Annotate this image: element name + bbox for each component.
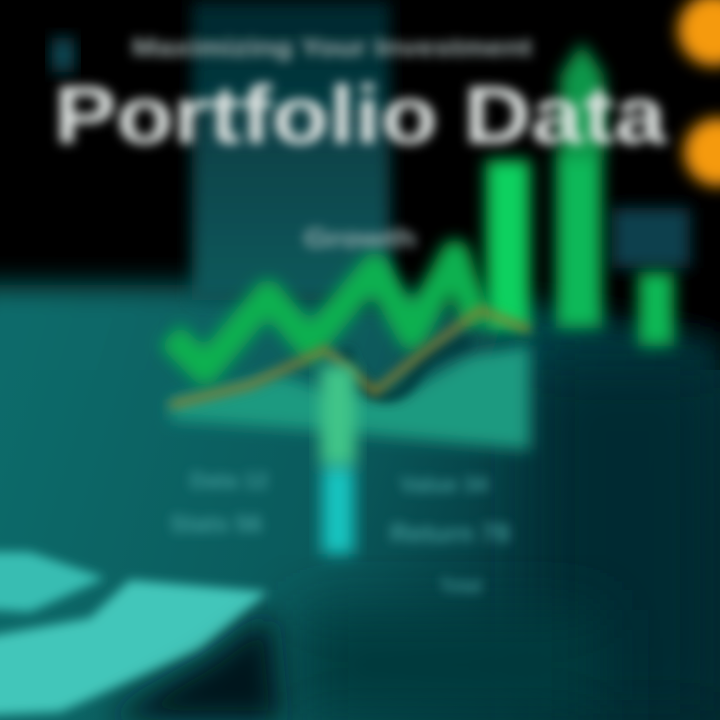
bar chart: tall green bars: [486, 42, 674, 346]
text block: lower data table: Value 34: [400, 472, 489, 497]
panel: bright teal bottom-left cards: [0, 552, 268, 716]
text block: lower data table: Data 12: [190, 468, 268, 493]
icon: orange coins: [678, 0, 720, 186]
shadow: bottom dark wedge: [105, 615, 280, 720]
line chart: dark shadow curve: [345, 340, 470, 396]
title: Portfolio Data: [54, 70, 668, 161]
chart label: Growth: [304, 223, 416, 253]
text block: lower data table: Return 78: [390, 518, 510, 548]
text block: lower data table: Stats 56: [170, 511, 262, 538]
line chart: orange trend line: [170, 310, 530, 405]
panel: right small teal screen: [612, 208, 690, 268]
subtitle: Maximizing Your Investment: [132, 34, 533, 62]
icon: small teal mark by title: [52, 38, 74, 72]
chart: central vertical bar: [320, 365, 356, 554]
text block: lower data table: Total: [440, 576, 482, 596]
line chart: green zigzag: [170, 255, 478, 370]
text block: lower data table: [170, 468, 510, 596]
area chart: teal-green area: [170, 345, 530, 450]
